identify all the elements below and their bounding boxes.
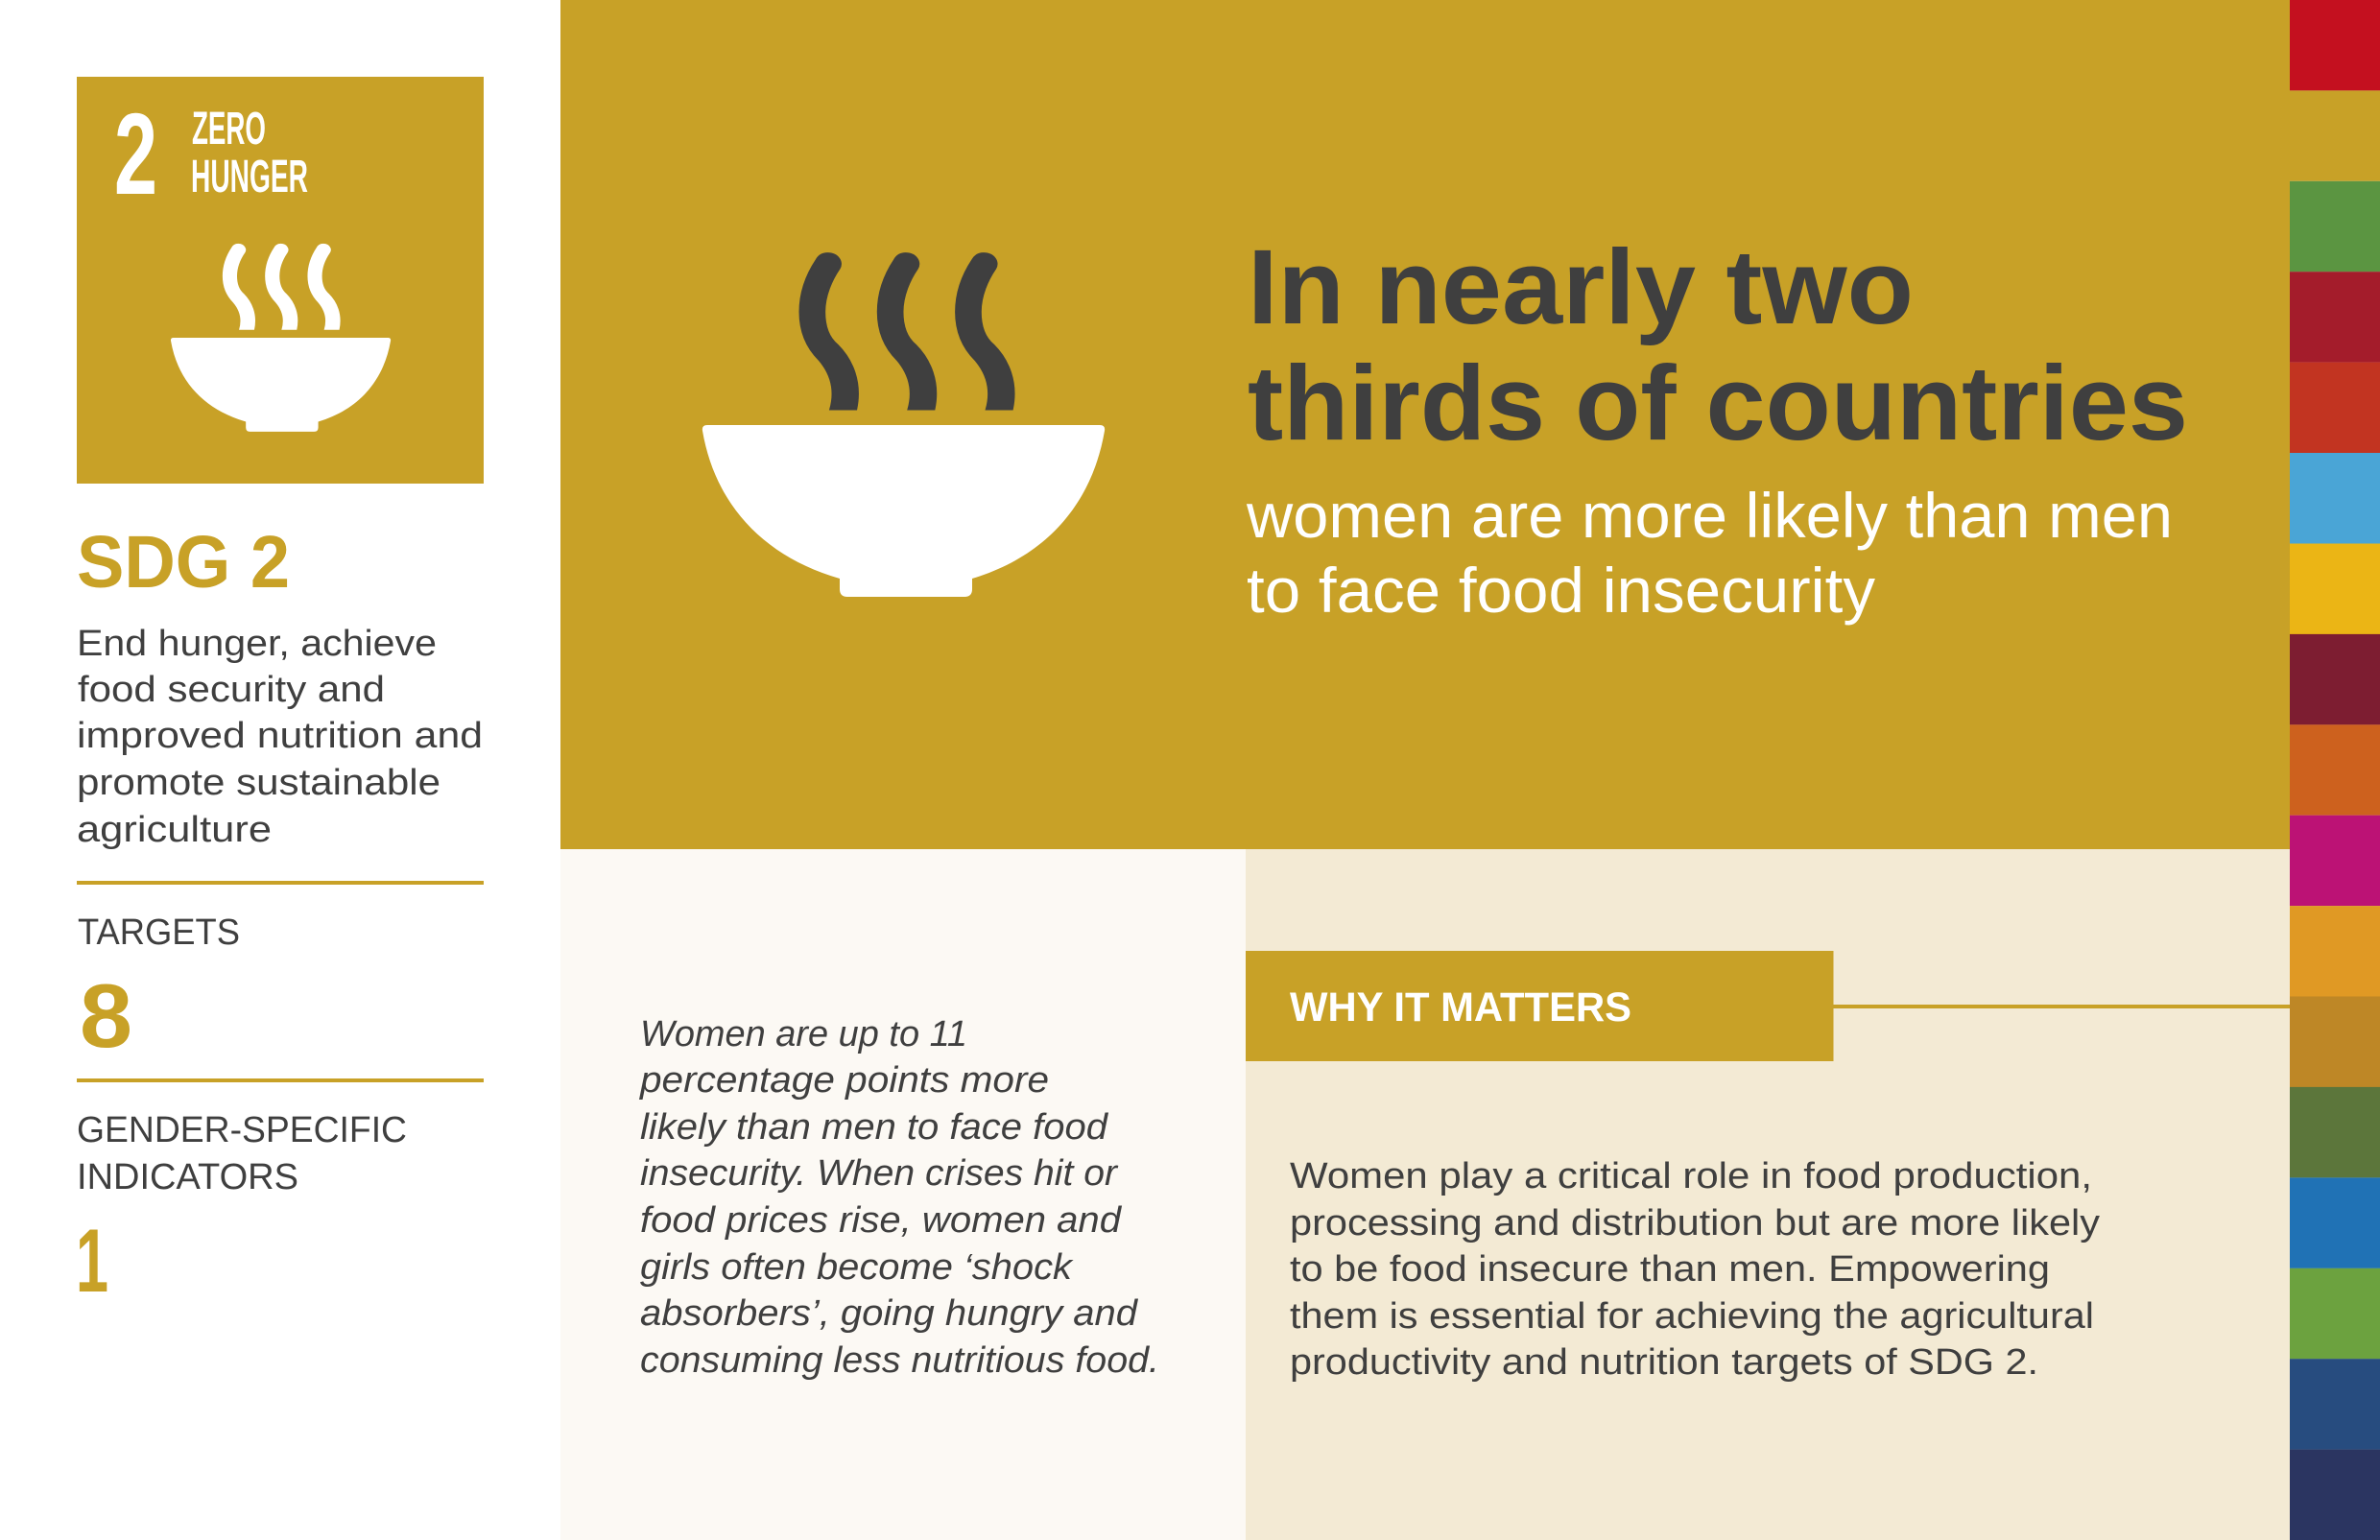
- text block: italic quote: absorbers’, going hungry and: [640, 1293, 1139, 1334]
- text block: why it matters body: [1290, 1156, 2100, 1383]
- text block: italic quote: Women are up to 11: [640, 1014, 967, 1054]
- heading: SDG 2: SDG 2: [77, 521, 290, 604]
- icon: small steam: [223, 244, 340, 329]
- text block: hero subheading: [1246, 480, 2173, 626]
- text block: italic quote: food prices rise, women and: [640, 1200, 1123, 1241]
- text block: goal description: [77, 624, 483, 850]
- text block: goal description: End hunger, achieve: [77, 624, 437, 664]
- banner: why it matters: [1246, 951, 1833, 1061]
- text block: italic quote: girls often become ‘shock: [640, 1247, 1074, 1288]
- icon: small bowl: [171, 338, 391, 432]
- text block: hero subheading: to face food insecurity: [1247, 555, 1875, 626]
- text block: targets label: TARGETS: [78, 912, 240, 953]
- heading: why it matters: WHY IT MATTERS: [1290, 984, 1631, 1031]
- icon: steam: [799, 253, 1014, 410]
- tile title: ZERO: [192, 104, 266, 154]
- heading: hero headline: thirds of countries: [1248, 344, 2188, 462]
- text block: why it matters body: to be food insecure than men. Empowering: [1290, 1249, 2050, 1290]
- text block: why it matters body: productivity and nutrition targets of SDG 2.: [1290, 1342, 2038, 1383]
- panel: left sidebar background: [0, 0, 560, 1540]
- panel: why it matters background: [1246, 849, 2290, 1540]
- text block: italic quote: [639, 1014, 1159, 1381]
- panel: hero gold banner: [560, 0, 2290, 849]
- connector line: why it matters: [1833, 1005, 2290, 1008]
- tile number: 2: [114, 88, 157, 219]
- tile title: HUNGER: [191, 152, 308, 202]
- text block: italic quote: insecurity. When crises hit or: [640, 1153, 1118, 1194]
- text block: gender-specific indicators label: [77, 1110, 407, 1197]
- tile title: [191, 104, 308, 202]
- heading: hero headline: [1248, 228, 2188, 462]
- icon: large steaming bowl: [702, 253, 1105, 597]
- icon: bowl: [702, 425, 1105, 597]
- text block: gender-specific indicators label: GENDER-SPECIFIC: [77, 1110, 407, 1150]
- text block: why it matters body: them is essential for achieving the agricultural: [1290, 1296, 2094, 1337]
- icon: SDG 2 zero hunger tile: [77, 77, 484, 484]
- text block: goal description: agriculture: [77, 810, 272, 850]
- text block: goal description: improved nutrition and: [77, 716, 483, 756]
- stat: targets count: 8: [80, 965, 132, 1066]
- text block: goal description: food security and: [78, 670, 385, 710]
- text block: hero subheading: women are more likely than men: [1246, 480, 2173, 551]
- text block: why it matters body: processing and distribution but are more likely: [1290, 1203, 2100, 1244]
- text block: gender-specific indicators label: INDICATORS: [77, 1157, 298, 1197]
- colour stripe: 17 SDG colours: [2290, 0, 2380, 1540]
- text block: italic quote: consuming less nutritious food.: [640, 1340, 1159, 1381]
- text block: italic quote: percentage points more: [639, 1060, 1049, 1101]
- text block: goal description: promote sustainable: [77, 763, 440, 803]
- text block: italic quote: likely than men to face food: [640, 1107, 1109, 1148]
- heading: hero headline: In nearly two: [1248, 228, 1914, 346]
- text block: why it matters body: Women play a critical role in food production,: [1290, 1156, 2092, 1196]
- stat: indicators count: 1: [76, 1210, 108, 1311]
- panel: quote background: [560, 849, 1246, 1540]
